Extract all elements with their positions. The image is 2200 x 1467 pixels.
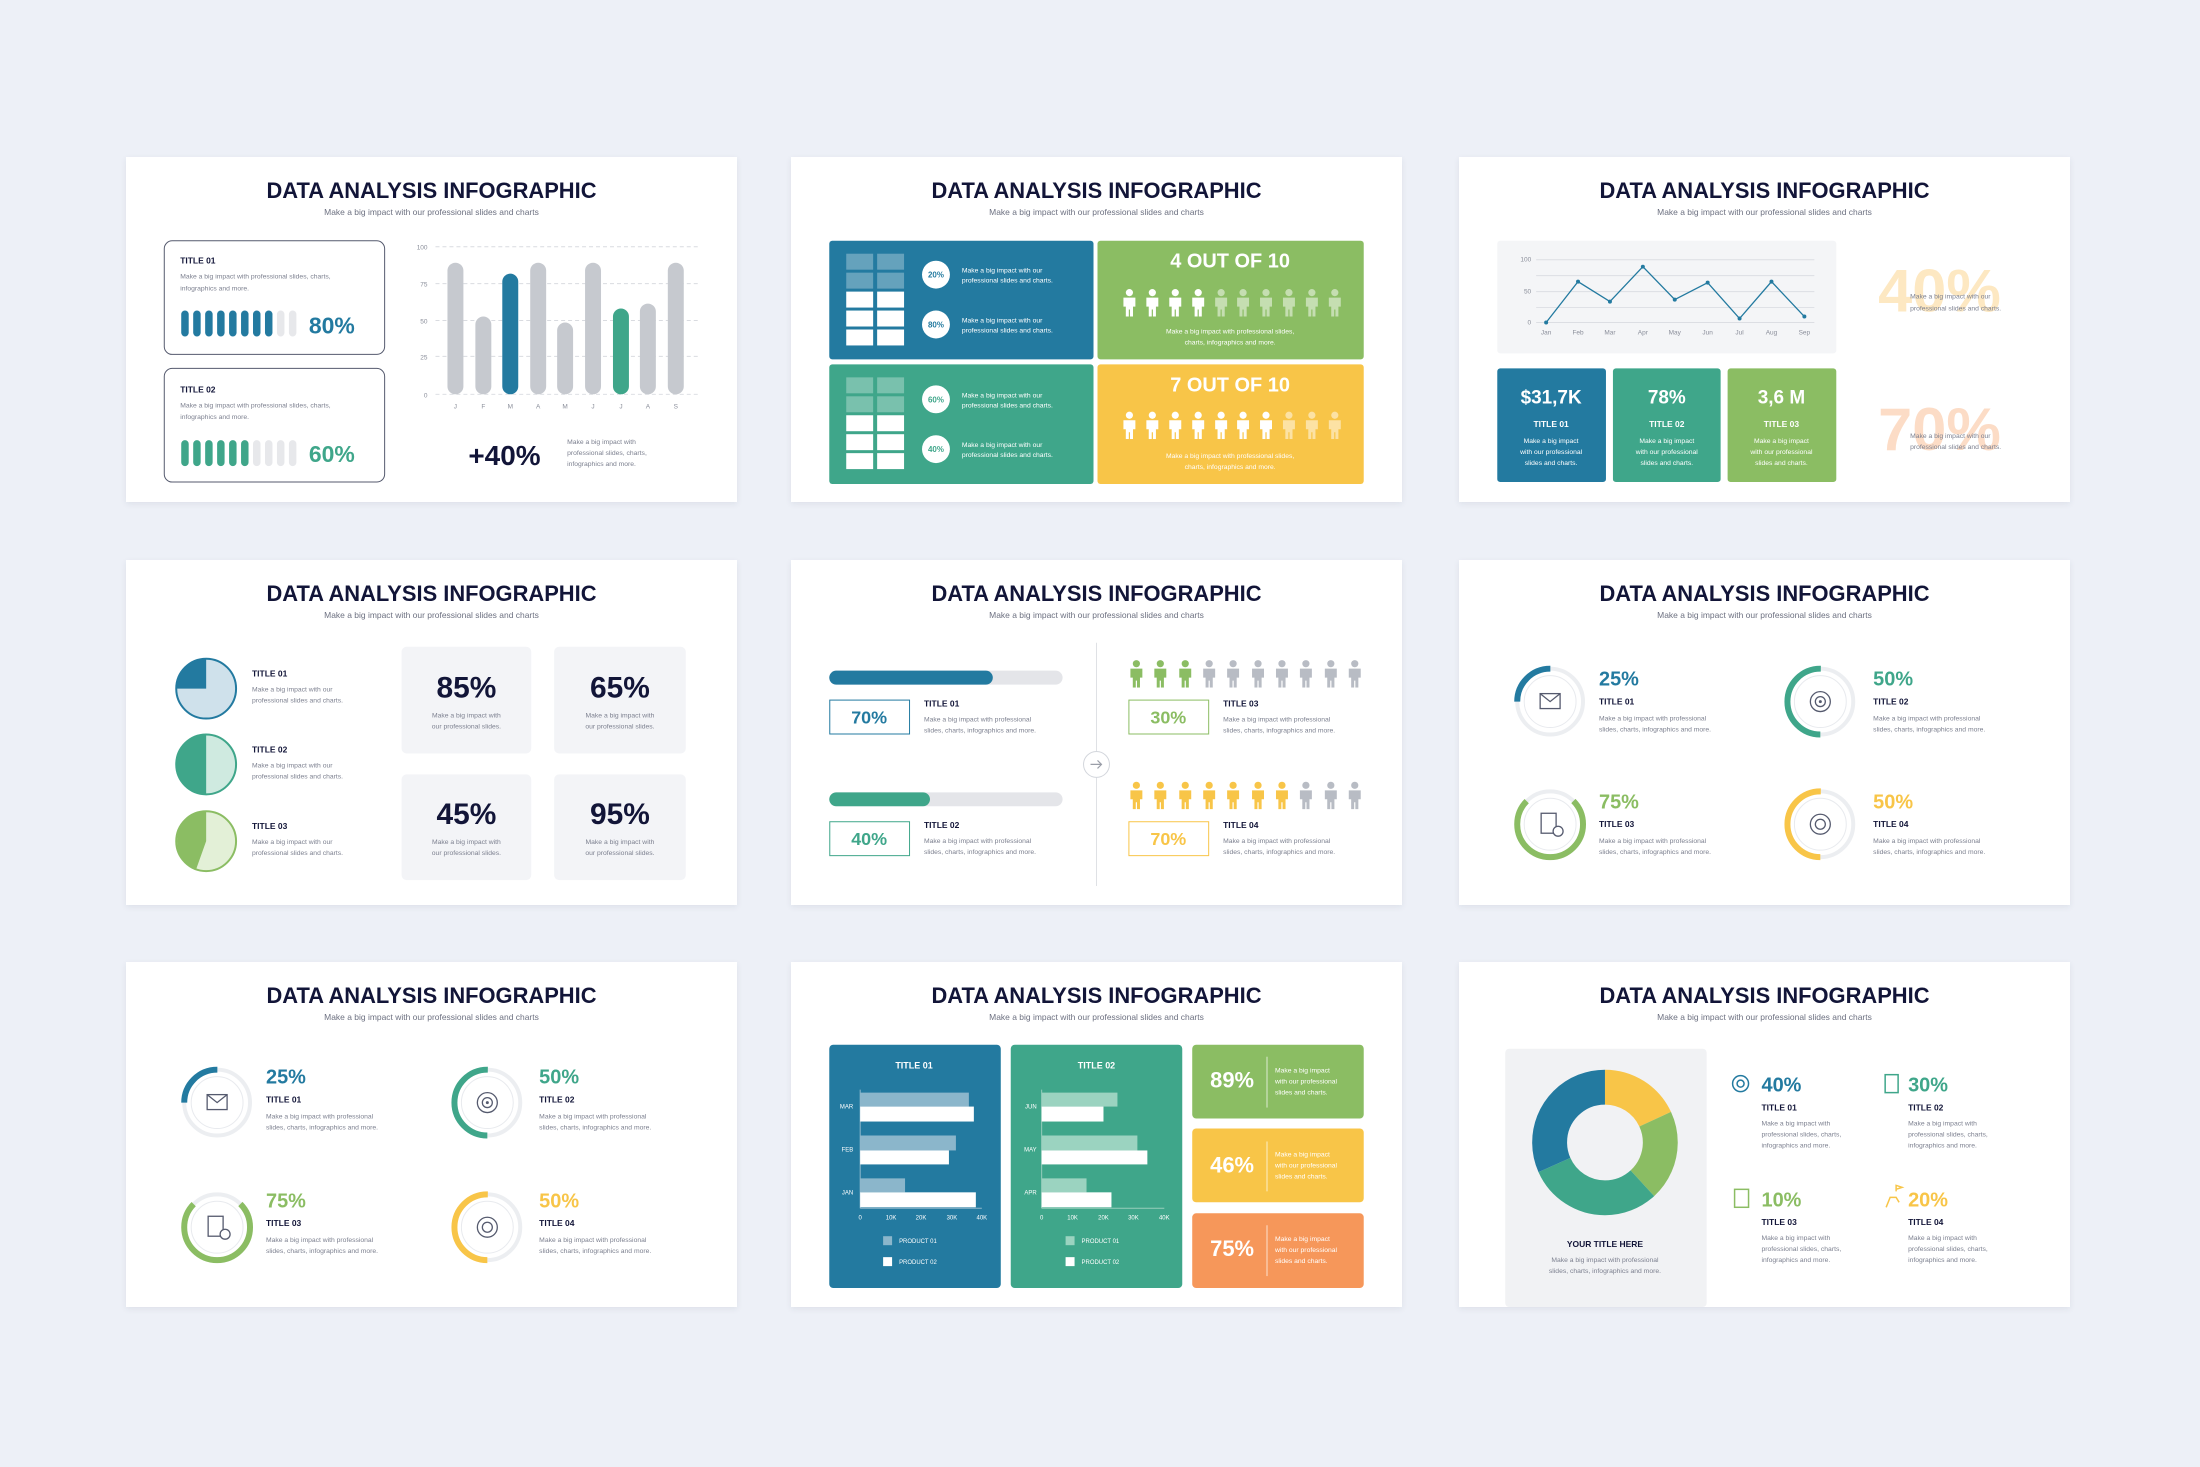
panel: blue 20% / 80%: professional slides and charts. xyxy=(962,278,1053,285)
people: title 03 30%: TITLE 03 xyxy=(1223,699,1259,709)
ring: 50% title 04: TITLE 04 xyxy=(539,1218,575,1228)
panel: title 01 bar chart: MAR xyxy=(840,1105,854,1111)
panel: yellow 7 out of 10: Make a big impact with professional slides, xyxy=(1166,453,1294,460)
progress: title 01 70%: slides, charts, infographics and more. xyxy=(924,727,1036,734)
slide 6: progress rings xyxy=(1459,560,2070,905)
bar chart: 75 xyxy=(420,282,428,289)
stat box: 75%: Make a big impact xyxy=(1275,1236,1330,1243)
title xyxy=(1599,178,1930,217)
ring: 50% title 04: Make a big impact with professional xyxy=(539,1237,647,1244)
card: title 02 60% xyxy=(164,368,385,482)
ring: 25% title 01 xyxy=(184,1067,378,1135)
title: Make a big impact with our professional slides and charts xyxy=(989,207,1204,217)
line chart xyxy=(1497,241,1836,353)
stat box: 3,6 M: 3,6 M xyxy=(1758,387,1805,408)
line chart: Apr xyxy=(1638,329,1649,336)
stat: 10% title 03: infographics and more. xyxy=(1762,1257,1830,1264)
card: title 01 80%: Make a big impact with professional slides, charts, xyxy=(180,274,331,281)
stat: +40%: professional slides, charts, xyxy=(567,450,647,457)
icon: arrow circle xyxy=(1084,751,1109,777)
line chart: Mar xyxy=(1604,329,1616,336)
bar chart: M xyxy=(508,403,513,410)
ring: 25% title 01: TITLE 01 xyxy=(1599,697,1635,707)
stat: 40% title 01: professional slides, charts, xyxy=(1762,1131,1841,1138)
title: DATA ANALYSIS INFOGRAPHIC xyxy=(931,983,1262,1008)
stat: +40% xyxy=(468,439,647,471)
panel: title 02 bar chart: TITLE 02 xyxy=(1078,1061,1115,1071)
panel: yellow 7 out of 10: charts, infographics and more. xyxy=(1185,464,1276,471)
panel: title 01 bar chart xyxy=(829,1045,1001,1288)
card: title 01 80%: 80% xyxy=(309,312,355,338)
ring: 75% title 03 xyxy=(171,1181,378,1274)
title: Make a big impact with our professional slides and charts xyxy=(1657,1012,1872,1022)
stat box: $31,7K: with our professional xyxy=(1519,449,1583,456)
bar chart: F xyxy=(481,403,485,410)
slide 1: bar chart xyxy=(126,157,737,502)
faded stat: 40%: professional slides and charts. xyxy=(1910,306,2001,313)
ring: 25% title 01: Make a big impact with professional xyxy=(266,1114,374,1121)
stat: 30% title 02: 30% xyxy=(1908,1075,1948,1097)
stat box: 3,6 M: with our professional xyxy=(1749,449,1813,456)
card: title 01 80% xyxy=(164,241,385,354)
panel: title 01 bar chart: JAN xyxy=(842,1190,853,1196)
stat box: 89%: Make a big impact xyxy=(1275,1068,1330,1075)
tile: 85%: our professional slides. xyxy=(432,724,501,731)
title xyxy=(266,983,597,1022)
stat: 20% title 04: infographics and more. xyxy=(1908,1257,1977,1264)
title: DATA ANALYSIS INFOGRAPHIC xyxy=(931,581,1262,606)
progress: title 02 40%: 40% xyxy=(851,829,887,849)
panel: title 02 bar chart: JUN xyxy=(1025,1105,1037,1111)
title xyxy=(931,983,1262,1022)
slide 8: horizontal bar charts and stat boxes xyxy=(791,962,1402,1307)
title: DATA ANALYSIS INFOGRAPHIC xyxy=(1599,983,1930,1008)
title xyxy=(266,178,597,217)
stat: 40% title 01: infographics and more. xyxy=(1762,1142,1830,1149)
stat: 20% title 04: 20% xyxy=(1908,1189,1948,1211)
stat box: $31,7K xyxy=(1497,368,1606,482)
stat: 40% title 01: Make a big impact with xyxy=(1762,1121,1831,1128)
panel: title 02 bar chart: 20K xyxy=(1098,1215,1109,1221)
stat box: 89% xyxy=(1192,1045,1364,1119)
card: title 02 60%: 60% xyxy=(309,441,355,467)
title: DATA ANALYSIS INFOGRAPHIC xyxy=(931,178,1262,203)
panel: title 02 bar chart: PRODUCT 02 xyxy=(1082,1260,1120,1266)
ring: 25% title 01: TITLE 01 xyxy=(266,1095,302,1105)
stat: 30% title 02: Make a big impact with xyxy=(1908,1121,1977,1128)
ring: 50% title 02: slides, charts, infographics and more. xyxy=(1873,727,1985,734)
tile: 45%: our professional slides. xyxy=(432,850,501,857)
line chart: 0 xyxy=(1528,320,1532,327)
slide 9: donut chart with stats xyxy=(1459,962,2070,1307)
stat box: $31,7K: slides and charts. xyxy=(1525,460,1578,467)
tile: 65%: Make a big impact with xyxy=(586,713,655,720)
stat: 30% title 02: TITLE 02 xyxy=(1908,1103,1944,1113)
panel: title 01 bar chart: 40K xyxy=(977,1215,987,1221)
bar chart: A xyxy=(646,403,651,410)
ring: 25% title 01: slides, charts, infographics and more. xyxy=(1599,727,1711,734)
ring: 75% title 03: 75% xyxy=(1599,791,1639,813)
title: Make a big impact with our professional slides and charts xyxy=(989,610,1204,620)
pie: title 03: Make a big impact with our xyxy=(252,839,333,846)
stat box: 78%: with our professional xyxy=(1635,449,1698,456)
panel: blue 20% / 80%: professional slides and charts. xyxy=(962,327,1053,334)
stat: 10% title 03: 10% xyxy=(1762,1189,1802,1211)
panel: teal 60% / 40% xyxy=(829,364,1094,484)
stat: 10% title 03: TITLE 03 xyxy=(1762,1217,1797,1227)
ring: 50% title 02 xyxy=(1787,669,1985,734)
stat: +40%: +40% xyxy=(468,440,541,471)
people: title 04 70%: 70% xyxy=(1150,829,1186,849)
line chart: Jul xyxy=(1735,329,1744,336)
stat: 30% title 02: professional slides, charts, xyxy=(1908,1131,1988,1138)
panel: title 01 bar chart: PRODUCT 02 xyxy=(899,1260,937,1266)
line chart: Jan xyxy=(1541,329,1552,336)
stat box: 3,6 M xyxy=(1728,368,1836,482)
tile: 45% xyxy=(402,774,531,880)
stat box: 46%: Make a big impact xyxy=(1275,1151,1330,1158)
card: title 01 80%: infographics and more. xyxy=(180,286,249,293)
panel: teal 60% / 40%: 40% xyxy=(928,445,944,454)
bar chart: 0 xyxy=(424,392,428,399)
faded stat: 70%: professional slides and charts. xyxy=(1910,444,2001,451)
tile: 65%: 65% xyxy=(590,672,650,705)
ring: 25% title 01: slides, charts, infographics and more. xyxy=(266,1125,378,1132)
stat box: 3,6 M: TITLE 03 xyxy=(1764,419,1799,429)
panel: blue 20% / 80% xyxy=(829,241,1094,359)
panel: blue 20% / 80%: 20% xyxy=(928,271,944,280)
stat box: 75%: 75% xyxy=(1210,1236,1254,1261)
stat box: 46%: slides and charts. xyxy=(1275,1173,1328,1180)
panel: green 4 out of 10: charts, infographics and more. xyxy=(1185,339,1276,346)
pie: title 03 xyxy=(176,811,343,871)
panel: title 01 bar chart: FEB xyxy=(842,1147,853,1153)
ring: 75% title 03: Make a big impact with professional xyxy=(266,1237,374,1244)
ring: 50% title 04: slides, charts, infographics and more. xyxy=(539,1248,651,1255)
faded stat: 70%: 70% xyxy=(1878,396,2001,463)
tile: 85%: 85% xyxy=(436,672,496,705)
panel: blue 20% / 80%: 80% xyxy=(928,321,944,330)
stat box: $31,7K: TITLE 01 xyxy=(1533,419,1569,429)
panel: donut chart: slides, charts, infographics and more. xyxy=(1549,1268,1661,1275)
panel: title 01 bar chart: 30K xyxy=(947,1215,957,1221)
title: Make a big impact with our professional slides and charts xyxy=(324,1012,539,1022)
panel: title 02 bar chart: 30K xyxy=(1128,1215,1139,1221)
title: DATA ANALYSIS INFOGRAPHIC xyxy=(266,983,597,1008)
faded stat: 70%: Make a big impact with our xyxy=(1910,433,1991,440)
panel: title 01 bar chart: PRODUCT 01 xyxy=(899,1239,937,1245)
tile: 45%: 45% xyxy=(436,798,496,831)
bar chart: J xyxy=(454,403,457,410)
people: title 03 30%: slides, charts, infographics and more. xyxy=(1223,727,1335,734)
panel: title 02 bar chart: MAY xyxy=(1024,1147,1037,1153)
ring: 50% title 04 xyxy=(1787,791,1985,857)
tile: 95% xyxy=(554,774,686,880)
progress: title 02 40%: TITLE 02 xyxy=(924,820,960,830)
panel: title 02 bar chart: 10K xyxy=(1067,1215,1078,1221)
title: Make a big impact with our professional slides and charts xyxy=(1657,207,1872,217)
pie: title 02: Make a big impact with our xyxy=(252,762,333,769)
title: DATA ANALYSIS INFOGRAPHIC xyxy=(1599,178,1930,203)
title xyxy=(931,581,1262,620)
pie: title 02: professional slides and charts. xyxy=(252,773,343,780)
progress: title 01 70%: TITLE 01 xyxy=(924,699,960,709)
panel: donut chart: YOUR TITLE HERE xyxy=(1567,1239,1643,1249)
ring: 25% title 01: Make a big impact with professional xyxy=(1599,716,1707,723)
line chart: 50 xyxy=(1524,289,1532,296)
line chart: May xyxy=(1669,329,1682,336)
title xyxy=(931,178,1262,217)
bar chart: J xyxy=(591,403,595,410)
people: title 04 70%: Make a big impact with professional xyxy=(1223,838,1331,845)
slide 3: line chart and stats xyxy=(1459,157,2070,502)
stat box: 89%: 89% xyxy=(1210,1068,1254,1093)
panel: yellow 7 out of 10 xyxy=(1097,364,1364,484)
tile: 65% xyxy=(554,647,686,753)
ring: 50% title 04: 50% xyxy=(539,1190,579,1212)
slide 7: progress rings variant xyxy=(126,962,737,1307)
pie: title 01: professional slides and charts. xyxy=(252,698,343,705)
tile: 95%: our professional slides. xyxy=(585,850,655,857)
stat box: 3,6 M: Make a big impact xyxy=(1754,438,1809,445)
pie: title 03: professional slides and charts. xyxy=(252,850,343,857)
bar chart: 25 xyxy=(420,354,428,361)
panel: blue 20% / 80%: Make a big impact with our xyxy=(962,268,1043,275)
stat: 20% title 04: professional slides, charts, xyxy=(1908,1246,1988,1253)
ring: 50% title 02: Make a big impact with professional xyxy=(539,1114,647,1121)
title: Make a big impact with our professional slides and charts xyxy=(324,610,539,620)
progress: title 01 70%: 70% xyxy=(851,708,887,728)
panel: donut chart xyxy=(1505,1049,1707,1307)
stat: 40% title 01 xyxy=(1733,1075,1841,1149)
panel: teal 60% / 40%: professional slides and charts. xyxy=(962,452,1053,459)
bar chart: 100 xyxy=(417,245,428,252)
ring: 50% title 04: TITLE 04 xyxy=(1873,819,1909,829)
faded stat: 40%: Make a big impact with our xyxy=(1910,294,1991,301)
line chart: Sep xyxy=(1799,329,1811,336)
line chart: 100 xyxy=(1520,257,1532,264)
pie: title 03: TITLE 03 xyxy=(252,821,288,831)
ring: 25% title 01 xyxy=(1517,669,1711,734)
people: title 04 70%: slides, charts, infographics and more. xyxy=(1223,849,1335,856)
stat box: 78%: slides and charts. xyxy=(1640,460,1693,467)
panel: green 4 out of 10 xyxy=(1097,241,1364,359)
panel: yellow 7 out of 10: 7 OUT OF 10 xyxy=(1170,374,1290,396)
bar chart: S xyxy=(674,403,679,410)
panel: title 02 bar chart xyxy=(1011,1045,1182,1288)
people: title 03 30%: Make a big impact with professional xyxy=(1223,717,1331,724)
ring: 25% title 01: 25% xyxy=(1599,669,1639,691)
panel: title 01 bar chart: 10K xyxy=(886,1215,896,1221)
stat box: 89%: with our professional xyxy=(1274,1079,1338,1086)
bar chart: A xyxy=(536,403,541,410)
stat: 40% title 01: TITLE 01 xyxy=(1762,1103,1797,1113)
bar chart: 50 xyxy=(420,319,428,326)
title: Make a big impact with our professional slides and charts xyxy=(1657,610,1872,620)
panel: teal 60% / 40%: 60% xyxy=(928,395,944,404)
title: Make a big impact with our professional slides and charts xyxy=(324,207,539,217)
stat: 40% title 01: 40% xyxy=(1762,1075,1802,1097)
ring: 75% title 03: TITLE 03 xyxy=(266,1218,302,1228)
stat box: 89%: slides and charts. xyxy=(1275,1090,1328,1097)
stat box: 75% xyxy=(1192,1213,1364,1288)
panel: title 02 bar chart: 0 xyxy=(1040,1215,1044,1221)
progress: title 01 70%: Make a big impact with professional xyxy=(924,717,1032,724)
stat box: 46%: 46% xyxy=(1210,1152,1254,1177)
stat box: 78%: Make a big impact xyxy=(1639,438,1694,445)
pie: title 01: TITLE 01 xyxy=(252,669,288,679)
tile: 95%: 95% xyxy=(590,798,650,831)
stat box: 46% xyxy=(1192,1129,1364,1202)
panel: teal 60% / 40%: professional slides and charts. xyxy=(962,402,1053,409)
progress: title 02 40%: slides, charts, infographics and more. xyxy=(924,849,1036,856)
pie: title 02 xyxy=(176,734,343,794)
pie: title 01 xyxy=(176,659,343,719)
ring: 50% title 02: TITLE 02 xyxy=(539,1095,575,1105)
stat box: $31,7K: $31,7K xyxy=(1521,387,1582,408)
progress: title 02 40%: Make a big impact with professional xyxy=(924,838,1032,845)
panel: title 02 bar chart: APR xyxy=(1024,1190,1037,1196)
title: Make a big impact with our professional slides and charts xyxy=(989,1012,1204,1022)
ring: 75% title 03: Make a big impact with professional xyxy=(1599,838,1707,845)
title xyxy=(1599,581,1930,620)
stat: 20% title 04: TITLE 04 xyxy=(1908,1217,1944,1227)
stat box: 75%: with our professional xyxy=(1274,1247,1338,1254)
line chart: Feb xyxy=(1572,329,1584,336)
ring: 75% title 03 xyxy=(1504,778,1711,871)
pie: title 01: Make a big impact with our xyxy=(252,687,333,694)
panel: teal 60% / 40%: Make a big impact with our xyxy=(962,442,1043,449)
ring: 50% title 02: 50% xyxy=(1873,669,1913,691)
pie: title 02: TITLE 02 xyxy=(252,744,288,754)
ring: 50% title 02 xyxy=(454,1067,651,1135)
stat box: 3,6 M: slides and charts. xyxy=(1755,460,1808,467)
stat: +40%: infographics and more. xyxy=(567,461,636,468)
tile: 85% xyxy=(402,647,531,753)
tile: 95%: Make a big impact with xyxy=(586,839,655,846)
tile: 65%: our professional slides. xyxy=(585,724,655,731)
panel: title 01 bar chart: 0 xyxy=(859,1215,863,1221)
tile: 45%: Make a big impact with xyxy=(432,839,501,846)
ring: 75% title 03: TITLE 03 xyxy=(1599,819,1635,829)
panel: title 02 bar chart: 40K xyxy=(1159,1215,1170,1221)
stat: 20% title 04 xyxy=(1886,1185,1988,1264)
card: title 02 60%: infographics and more. xyxy=(180,414,249,421)
ring: 50% title 02: slides, charts, infographics and more. xyxy=(539,1125,651,1132)
tile: 85%: Make a big impact with xyxy=(432,713,501,720)
stat: 20% title 04: Make a big impact with xyxy=(1908,1235,1977,1242)
ring: 75% title 03: slides, charts, infographics and more. xyxy=(1599,849,1711,856)
stat: +40%: Make a big impact with xyxy=(567,439,636,446)
panel: title 01 bar chart: TITLE 01 xyxy=(895,1061,933,1071)
panel: title 01 bar chart: 20K xyxy=(916,1215,926,1221)
title xyxy=(1599,983,1930,1022)
title: DATA ANALYSIS INFOGRAPHIC xyxy=(1599,581,1930,606)
stat: 30% title 02: infographics and more. xyxy=(1908,1142,1977,1149)
line chart: Jun xyxy=(1702,329,1713,336)
ring: 75% title 03: slides, charts, infographics and more. xyxy=(266,1248,378,1255)
stat box: 75%: slides and charts. xyxy=(1275,1258,1328,1265)
people: title 04 70%: TITLE 04 xyxy=(1223,820,1259,830)
ring: 50% title 02: 50% xyxy=(539,1067,579,1089)
panel: donut chart: Make a big impact with professional xyxy=(1551,1257,1659,1264)
bar chart: M xyxy=(562,403,568,410)
ring: 25% title 01: 25% xyxy=(266,1067,306,1089)
panel: green 4 out of 10: 4 OUT OF 10 xyxy=(1170,251,1290,273)
progress: title 02 40% xyxy=(829,792,1063,856)
ring: 50% title 04: slides, charts, infographics and more. xyxy=(1873,849,1985,856)
ring: 75% title 03: 75% xyxy=(266,1190,306,1212)
stat box: 78%: 78% xyxy=(1648,387,1686,408)
stat: 30% title 02 xyxy=(1885,1075,1988,1149)
progress: title 01 70% xyxy=(829,671,1063,734)
line chart: Aug xyxy=(1766,329,1778,336)
people: title 04 70% xyxy=(1129,782,1361,856)
ring: 50% title 02: TITLE 02 xyxy=(1873,697,1909,707)
slide 2: people panels xyxy=(791,157,1402,502)
people: title 03 30%: 30% xyxy=(1150,708,1186,728)
stat box: 78% xyxy=(1613,368,1721,482)
ring: 50% title 02: Make a big impact with professional xyxy=(1873,716,1981,723)
card: title 02 60%: Make a big impact with professional slides, charts, xyxy=(180,402,331,409)
card: title 02 60%: TITLE 02 xyxy=(180,384,216,394)
ring: 50% title 04: Make a big impact with professional xyxy=(1873,838,1981,845)
stat: 10% title 03 xyxy=(1735,1189,1841,1264)
title: DATA ANALYSIS INFOGRAPHIC xyxy=(266,581,597,606)
panel: green 4 out of 10: Make a big impact with professional slides, xyxy=(1166,328,1294,335)
stat box: 46%: with our professional xyxy=(1274,1162,1338,1169)
stat box: $31,7K: Make a big impact xyxy=(1524,438,1579,445)
slide 4: pies and percentage tiles xyxy=(126,560,737,905)
card: title 01 80%: TITLE 01 xyxy=(180,256,216,266)
stat box: 78%: TITLE 02 xyxy=(1649,419,1685,429)
stat: 10% title 03: Make a big impact with xyxy=(1762,1235,1831,1242)
faded stat: 40%: 40% xyxy=(1878,258,2001,325)
panel: title 02 bar chart: PRODUCT 01 xyxy=(1082,1239,1120,1245)
title xyxy=(266,581,597,620)
stat: 10% title 03: professional slides, charts, xyxy=(1762,1246,1841,1253)
panel: blue 20% / 80%: Make a big impact with our xyxy=(962,318,1043,325)
bar chart: J xyxy=(619,403,623,410)
bar chart xyxy=(417,245,700,410)
slide 5: progress bars and people xyxy=(791,560,1402,905)
people: title 03 30% xyxy=(1129,660,1361,734)
title: DATA ANALYSIS INFOGRAPHIC xyxy=(266,178,597,203)
ring: 50% title 04: 50% xyxy=(1873,791,1913,813)
panel: teal 60% / 40%: Make a big impact with our xyxy=(962,392,1043,399)
ring: 50% title 04 xyxy=(454,1190,651,1260)
